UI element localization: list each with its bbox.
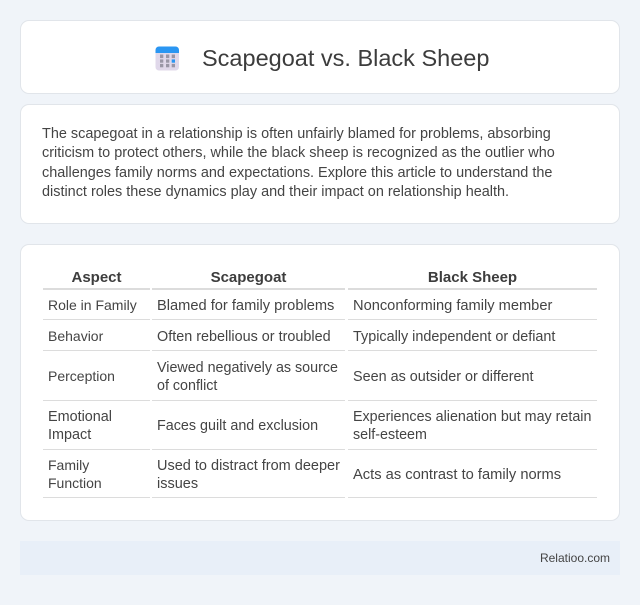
title: Scapegoat vs. Black Sheep [202,45,489,71]
icon: calendar [156,46,179,70]
text block: introduction: criticism to protect others, while the black sheep is recognized as the outlier who [42,145,555,161]
header: Black Sheep: Black Sheep [428,269,517,286]
row: Perception [48,360,534,394]
row: Emotional Impact: Faces guilt and exclusion [157,418,318,434]
row: Emotional Impact: Emotional [48,409,112,425]
row: Role in Family: Role in Family [48,297,137,313]
header: Scapegoat: Scapegoat [211,269,286,286]
row: Family Function: issues [157,476,198,492]
row: Emotional Impact [48,409,591,443]
panel: comparison table [20,244,620,521]
text block: introduction: The scapegoat in a relationship is often unfairly blamed for problems, absorbing [42,126,551,142]
row: Behavior: Behavior [48,328,103,344]
footer credit: Relatioo.com [540,551,610,565]
row: Behavior [48,328,556,345]
row: Perception: Perception [48,368,115,384]
row: Emotional Impact: self-esteem [353,427,427,443]
row: Behavior: Often rebellious or troubled [157,329,331,345]
row: Perception: of conflict [157,378,217,394]
row: Emotional Impact: Experiences alienation but may retain [353,409,591,425]
row: Family Function [48,457,561,492]
table header [71,269,517,286]
row: Emotional Impact: Impact [48,427,91,443]
text block: introduction [42,126,555,200]
row: Family Function: Family [48,457,89,473]
panel: introduction [20,104,620,224]
row: Behavior: Typically independent or defiant [353,329,555,345]
panel: title card [20,20,620,94]
text block: introduction: distinct roles these dynamics play and their impact on relationship health. [42,184,509,200]
footer bar [20,541,620,575]
row: Role in Family: Nonconforming family member [353,298,552,314]
row: Perception: Seen as outsider or different [353,369,534,385]
row: Role in Family: Blamed for family problems [157,298,334,314]
row: Family Function: Function [48,475,102,491]
text block: introduction: challenges family norms and expectations. Explore this article to understand the [42,165,552,181]
row: Perception: Viewed negatively as source [157,360,338,376]
row: Family Function: Used to distract from deeper [157,458,340,474]
row: Family Function: Acts as contrast to family norms [353,467,561,483]
header: Aspect: Aspect [71,269,122,286]
row: Role in Family [48,297,552,314]
